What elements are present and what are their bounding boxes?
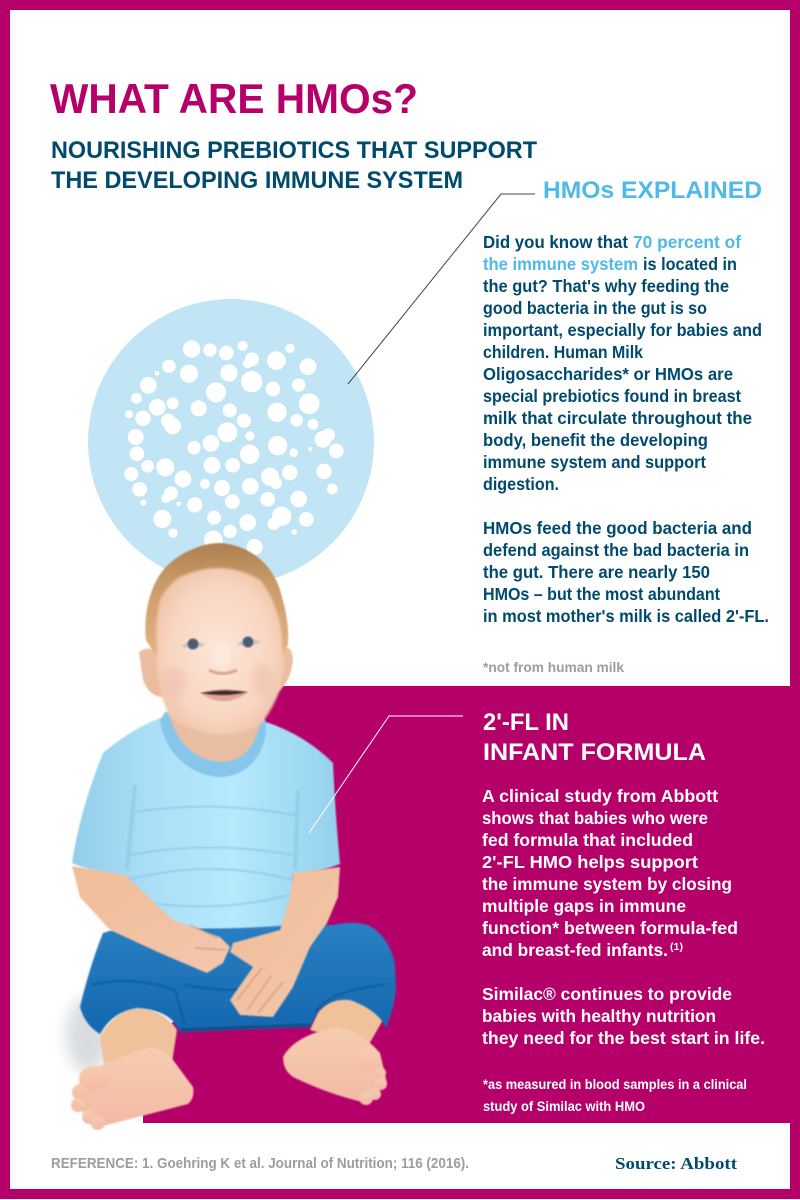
text block: 2'-FL: multiple gaps in immune bbox=[482, 896, 686, 916]
hair bbox=[145, 543, 288, 655]
text block: HMOs explained: the gut? That's why feeding the bbox=[483, 276, 729, 296]
text block: HMOs explained: special prebiotics found in breast bbox=[483, 386, 741, 406]
text block: HMOs explained: immune system and support bbox=[483, 452, 706, 472]
nose bbox=[209, 642, 237, 674]
text block: HMOs explained bbox=[483, 232, 769, 626]
subtitle: THE DEVELOPING IMMUNE SYSTEM bbox=[51, 167, 463, 194]
heading: 2'-FL in infant formula: INFANT FORMULA bbox=[483, 739, 706, 766]
footnote: blood samples: study of Similac with HMO bbox=[483, 1098, 645, 1114]
text block: HMOs explained: the gut. There are nearly 150 bbox=[483, 562, 710, 582]
text block: HMOs explained: Did you know that bbox=[483, 232, 628, 252]
heading: 2'-FL in infant formula: 2'-FL IN bbox=[483, 709, 569, 736]
text block: 2'-FL: function* between formula-fed bbox=[482, 918, 738, 938]
title: WHAT ARE HMOs? bbox=[50, 75, 418, 122]
text block: 2'-FL: fed formula that included bbox=[482, 830, 693, 850]
magenta panel background bbox=[143, 686, 790, 1123]
text block: HMOs explained: HMOs – but the most abundant bbox=[483, 584, 720, 604]
baby legs bbox=[100, 996, 384, 1066]
text block: HMOs explained: digestion. bbox=[483, 474, 559, 494]
eyes bbox=[181, 636, 261, 650]
baby shirt bbox=[72, 712, 340, 928]
text block: HMOs explained: the immune system bbox=[483, 254, 638, 274]
source: Source: Abbott bbox=[615, 1154, 737, 1173]
heading: 2'-FL in infant formula bbox=[483, 709, 706, 766]
text block: HMOs explained: is located in bbox=[643, 254, 737, 274]
text block: HMOs explained: good bacteria in the gut is so bbox=[483, 298, 707, 318]
text block: HMOs explained: important, especially for babies and bbox=[483, 320, 762, 340]
text block: HMOs explained: 70 percent of bbox=[633, 232, 741, 252]
neck bbox=[168, 705, 262, 762]
pants folds bbox=[92, 981, 385, 1030]
callout line: HMOs explained bbox=[348, 194, 535, 384]
baby photo illustration bbox=[66, 543, 463, 1130]
baby pants bbox=[80, 923, 396, 1034]
text block: HMOs explained: HMOs feed the good bacteria and bbox=[483, 518, 752, 538]
heading: HMOs explained: HMOs EXPLAINED bbox=[543, 177, 762, 204]
text block: 2'-FL: the immune system by closing bbox=[482, 874, 732, 894]
text block: HMOs explained: in most mother's milk is called 2'-FL. bbox=[483, 606, 769, 626]
face bbox=[156, 568, 284, 735]
text block: HMOs explained: Oligosaccharides* or HMOs are bbox=[483, 364, 733, 384]
text block: 2'-FL: (1) bbox=[670, 942, 683, 953]
ears bbox=[139, 649, 164, 697]
text block: HMOs explained: children. Human Milk bbox=[483, 342, 643, 362]
cheeks bbox=[163, 666, 187, 698]
mouth bbox=[200, 689, 248, 701]
footnote: blood samples bbox=[483, 1076, 747, 1114]
baby head bbox=[139, 543, 293, 762]
callout line: 2'-FL bbox=[309, 716, 463, 833]
text block: 2'-FL: Similac® continues to provide bbox=[482, 984, 732, 1004]
footnote: not from human milk: *not from human milk bbox=[483, 659, 624, 675]
text block: 2'-FL bbox=[482, 786, 765, 1048]
text block: HMOs explained: milk that circulate throughout the bbox=[483, 408, 752, 428]
text block: HMOs explained: body, benefit the developing bbox=[483, 430, 708, 450]
text block: 2'-FL: shows that babies who were bbox=[482, 808, 708, 828]
circle of HMO molecules bbox=[88, 299, 374, 585]
text block: 2'-FL: A clinical study from Abbott bbox=[482, 786, 718, 806]
text block: 2'-FL: 2'-FL HMO helps support bbox=[482, 852, 698, 872]
subtitle: NOURISHING PREBIOTICS THAT SUPPORT bbox=[51, 137, 537, 164]
text block: 2'-FL: they need for the best start in life. bbox=[482, 1028, 765, 1048]
floor shadow bbox=[66, 997, 110, 1073]
subtitle bbox=[51, 137, 537, 194]
footnote: blood samples: *as measured in blood samples in a clinical bbox=[483, 1076, 747, 1092]
text block: 2'-FL: and breast-fed infants. bbox=[482, 940, 668, 960]
text block: HMOs explained: defend against the bad bacteria in bbox=[483, 540, 749, 560]
baby feet bbox=[71, 1027, 387, 1130]
text block: 2'-FL: babies with healthy nutrition bbox=[482, 1006, 716, 1026]
baby arms and hands bbox=[72, 866, 340, 1017]
reference: REFERENCE: 1. Goehring K et al. Journal of Nutrition; 116 (2016). bbox=[51, 1155, 469, 1172]
